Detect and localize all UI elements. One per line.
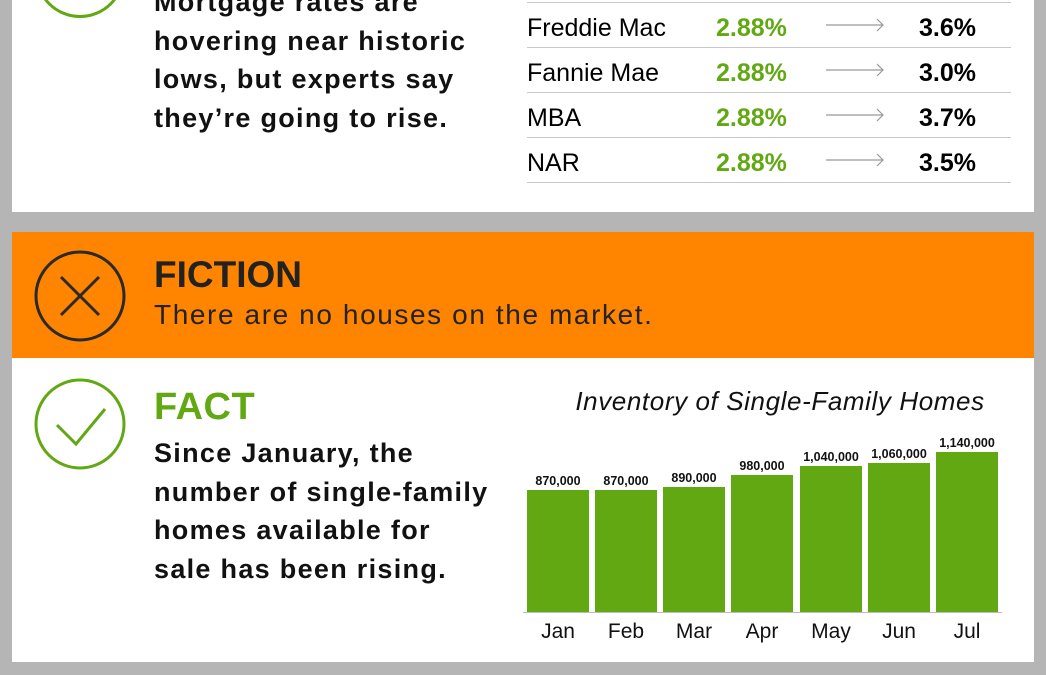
- panel: fiction banner: [12, 232, 1034, 358]
- bar chart: 870,000: [535, 474, 581, 488]
- row: Freddie Mac: Freddie Mac: [527, 14, 666, 42]
- bar chart: 870,000: [603, 474, 649, 488]
- bar chart: 890,000: [671, 471, 717, 485]
- axis labels: Feb: [608, 620, 644, 643]
- table: rate forecasts: [527, 2, 1011, 183]
- row: MBA: [527, 93, 1011, 138]
- axis labels: Jan: [541, 620, 575, 643]
- text: fact statement: [154, 438, 488, 584]
- row: MBA: 2.88%: [716, 104, 787, 132]
- icon: check circle (top): [35, 0, 125, 18]
- row: NAR: 3.5%: [919, 149, 976, 177]
- axis labels: Apr: [746, 620, 778, 643]
- text: mortgage rates: they’re going to rise.: [154, 102, 448, 132]
- row: Freddie Mac: [527, 3, 1011, 48]
- bar chart: 1,060,000: [871, 447, 927, 461]
- chart title: Inventory of Single-Family Homes: [575, 386, 985, 416]
- text: fact statement: Since January, the: [154, 438, 414, 468]
- heading: FICTION: FICTION: [154, 254, 302, 295]
- row: MBA: 3.7%: [919, 104, 976, 132]
- bar chart: 1,040,000: [803, 450, 859, 464]
- axis labels: Jun: [882, 620, 916, 643]
- text: fact statement: homes available for: [154, 515, 431, 545]
- axis labels: [541, 620, 980, 643]
- panel: fact with chart: [12, 358, 1034, 662]
- row: MBA: MBA: [527, 104, 581, 132]
- bar chart: 1,140,000: [939, 436, 995, 450]
- row: NAR: [527, 138, 1011, 183]
- icon: x circle: [34, 250, 126, 342]
- row: Freddie Mac: 2.88%: [716, 14, 787, 42]
- text: mortgage rates: [154, 0, 466, 132]
- row: Freddie Mac: 3.6%: [919, 14, 976, 42]
- row: Fannie Mae: 3.0%: [919, 59, 976, 87]
- icon: check circle: [34, 378, 126, 470]
- row: NAR: NAR: [527, 149, 580, 177]
- row: NAR: 2.88%: [716, 149, 787, 177]
- text: fact statement: sale has been rising.: [154, 554, 447, 584]
- text: fact statement: number of single-family: [154, 476, 488, 506]
- axis labels: Mar: [676, 620, 712, 643]
- heading: FACT: FACT: [154, 386, 255, 428]
- row: Fannie Mae: Fannie Mae: [527, 59, 659, 87]
- row: Fannie Mae: [527, 48, 1011, 93]
- axis labels: May: [811, 620, 851, 643]
- bar chart: [523, 436, 1002, 613]
- text: fiction statement: There are no houses on the market.: [154, 299, 654, 330]
- row: Fannie Mae: 2.88%: [716, 59, 787, 87]
- axis labels: Jul: [954, 620, 980, 643]
- text: mortgage rates: hovering near historic: [154, 26, 466, 56]
- bar chart: 980,000: [739, 459, 785, 473]
- panel: top fact: [12, 0, 1034, 212]
- text: mortgage rates: lows, but experts say: [154, 64, 454, 94]
